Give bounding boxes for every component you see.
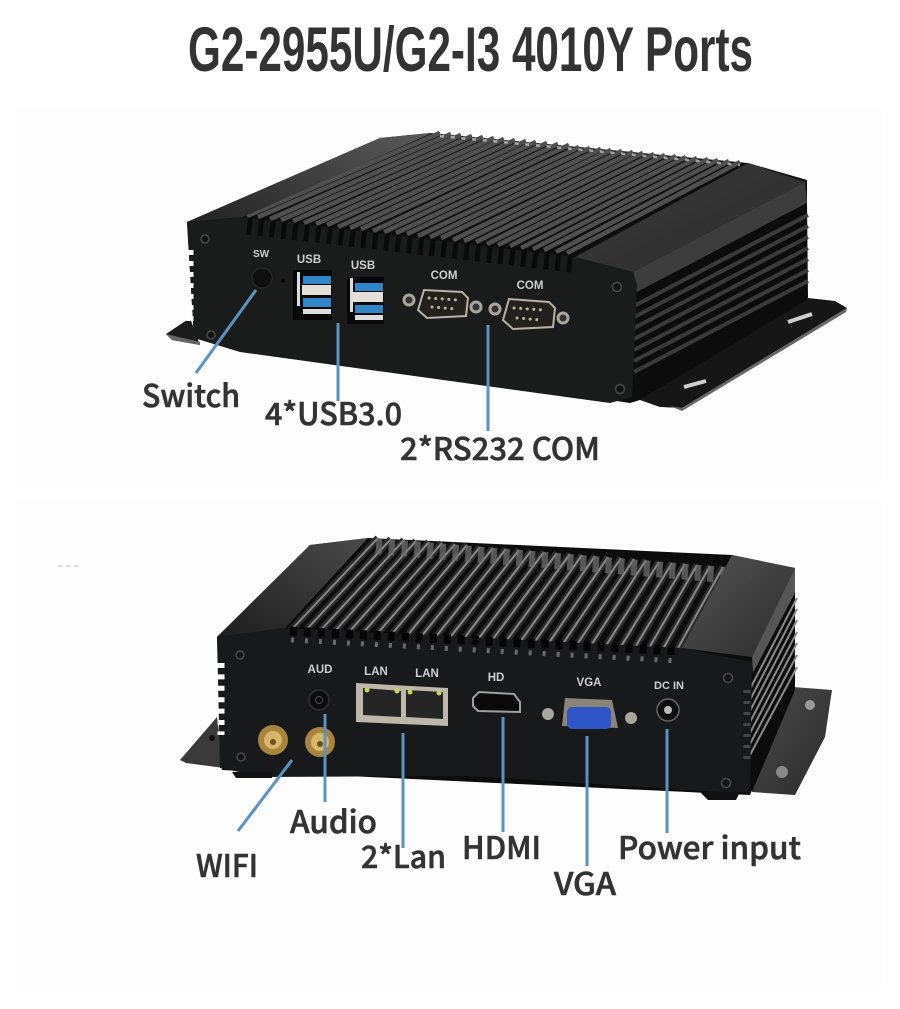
dc in jack: DC IN bbox=[654, 680, 684, 692]
left cap bbox=[187, 133, 432, 222]
label: hdmi: HDMI bbox=[462, 823, 541, 868]
left vents bbox=[218, 663, 224, 735]
front plate bbox=[187, 217, 637, 403]
switch button: SW bbox=[253, 249, 270, 260]
usb ports: USB bbox=[351, 260, 375, 272]
audio jack: AUD bbox=[308, 664, 332, 676]
mounting flanges bbox=[180, 687, 832, 795]
label: switch: Switch bbox=[142, 371, 240, 416]
callouts: rear ports bbox=[196, 714, 801, 904]
label: vga: VGA bbox=[553, 859, 617, 904]
feet bbox=[232, 772, 740, 800]
hdmi port: HD bbox=[488, 672, 504, 684]
lan ports: LAN bbox=[415, 668, 439, 680]
fin teeth bbox=[247, 226, 572, 264]
wifi antenna connectors bbox=[258, 725, 335, 757]
lan ports: LAN bbox=[364, 666, 388, 678]
screws bbox=[201, 235, 624, 394]
leader line: switch bbox=[196, 290, 256, 373]
body silhouette bbox=[217, 538, 795, 795]
screws bbox=[236, 651, 732, 788]
audio jack bbox=[308, 664, 332, 710]
leader line: usb bbox=[336, 323, 340, 401]
com ports bbox=[404, 270, 568, 329]
vga port bbox=[542, 677, 637, 729]
label: usb: 4*USB3.0 bbox=[265, 389, 402, 434]
leader line: lan bbox=[402, 733, 404, 848]
leader line: wifi bbox=[238, 760, 292, 831]
right vents bbox=[744, 690, 750, 767]
left cap bbox=[217, 538, 368, 637]
heat sink fins bbox=[293, 538, 725, 657]
side ribs bbox=[634, 203, 808, 400]
side ribs bbox=[750, 593, 797, 792]
mounting flanges bbox=[166, 298, 847, 411]
switch button bbox=[252, 249, 285, 288]
leader line: hdmi bbox=[502, 717, 504, 832]
leader line: audio bbox=[324, 714, 326, 802]
hdmi port bbox=[473, 672, 520, 712]
label: audio: Audio bbox=[290, 797, 377, 842]
com ports: COM bbox=[517, 280, 543, 292]
label: wifi: WIFI bbox=[196, 841, 258, 886]
dc in jack bbox=[654, 680, 684, 721]
vga port: VGA bbox=[577, 677, 601, 689]
label: power input: Power input bbox=[618, 823, 801, 868]
usb ports: USB bbox=[297, 254, 321, 266]
label: lan: 2*Lan bbox=[361, 832, 446, 877]
leader line: vga bbox=[586, 736, 588, 866]
leader line: power bbox=[666, 729, 668, 833]
panel: front ports device bbox=[166, 133, 847, 411]
fin teeth bbox=[290, 631, 681, 661]
left vents bbox=[186, 250, 194, 322]
com ports: COM bbox=[431, 270, 457, 282]
heat sink fins bbox=[247, 133, 740, 253]
lan ports bbox=[356, 666, 448, 726]
right cap bbox=[682, 555, 795, 673]
right cap bbox=[575, 163, 807, 292]
usb ports bbox=[293, 254, 384, 324]
body silhouette bbox=[187, 133, 807, 403]
front plate bbox=[217, 628, 752, 792]
callouts: front ports bbox=[142, 290, 600, 469]
label: com: 2*RS232 COM bbox=[400, 424, 600, 469]
leader line: com bbox=[486, 325, 490, 431]
panel: rear ports device bbox=[180, 538, 832, 800]
